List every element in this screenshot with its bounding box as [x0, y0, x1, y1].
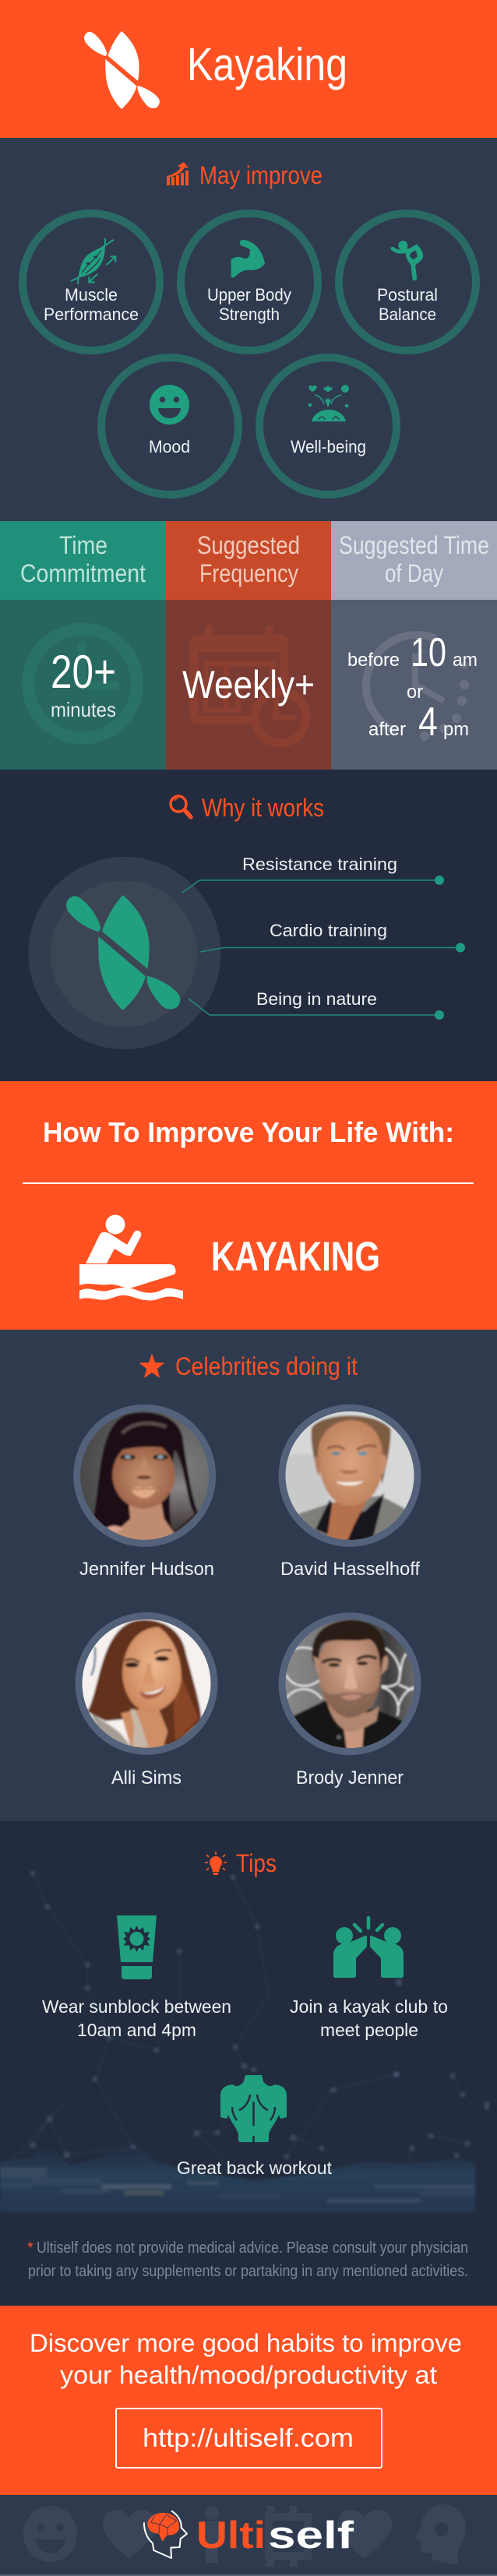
icon: clock background [366, 635, 469, 741]
tip: sunblock [42, 1915, 231, 2040]
badge: postural balance [339, 213, 476, 351]
label: meet people [320, 2020, 418, 2040]
url button: http://ultiself.com [143, 2423, 354, 2452]
label: Strength [219, 305, 280, 324]
name: Alli Sims: Alli Sims [111, 1767, 182, 1788]
panel: celebrities [76, 1352, 422, 1788]
time before: before [347, 650, 400, 671]
footer background icons [23, 2504, 466, 2567]
label: Muscle [65, 285, 118, 305]
url button [116, 2409, 382, 2468]
unit: minutes [51, 698, 116, 721]
heading: why it works: Why it works [202, 794, 324, 822]
value: 20+ [51, 646, 116, 698]
panel: call to action [0, 2306, 497, 2495]
heading: celebrities doing it: Celebrities doing it [175, 1352, 358, 1380]
callout: resistance training [182, 855, 444, 893]
heading: Frequency [199, 559, 298, 587]
icon: yoga pose [393, 241, 423, 278]
name: Brody Jenner: Brody Jenner [296, 1767, 404, 1788]
callout: being in nature [189, 989, 444, 1020]
icon: kayak and paddle [66, 895, 180, 1010]
icon: kayaker [79, 1215, 183, 1300]
label: Join a kayak club to [290, 1996, 448, 2017]
time after: after [368, 719, 406, 740]
icon: sunblock tube [117, 1915, 157, 1979]
panel: may improve [23, 161, 476, 495]
or: or [407, 682, 423, 703]
label: Wear sunblock between [42, 1996, 231, 2017]
heading: tips [205, 1849, 277, 1877]
icon: clock background [28, 629, 137, 738]
name: Jennifer Hudson: Jennifer Hudson [79, 1559, 214, 1580]
label: Great back workout [177, 2158, 333, 2178]
panel: time commitment [0, 521, 165, 770]
name: David Hasselhoff: David Hasselhoff [280, 1559, 420, 1580]
label: Upper Body [207, 285, 291, 305]
time after: pm [443, 719, 469, 740]
activity name: KAYAKING [211, 1234, 380, 1280]
callout: resistance training: Resistance training [242, 855, 397, 874]
badge: well-being [259, 358, 397, 495]
logo: ultiself: self [268, 2514, 354, 2557]
badge: upper body strength [181, 213, 318, 351]
logo: ultiself [144, 2511, 354, 2558]
icon: well-being [308, 385, 349, 421]
heading: Suggested [197, 531, 300, 559]
panel: suggested frequency [165, 521, 331, 770]
time before: 10 [411, 630, 446, 675]
portrait: Alli Sims [77, 1615, 217, 1755]
text: Discover more good habits to improve [30, 2329, 462, 2357]
panel: footer [0, 2495, 497, 2576]
heading: may improve: May improve [199, 161, 323, 189]
label: Postural [377, 285, 438, 305]
panel: how to improve banner [0, 1081, 497, 1330]
badge: mood [101, 358, 238, 495]
icon: flexed arm [231, 240, 265, 278]
tip: back workout [177, 2075, 333, 2178]
label: Performance [44, 305, 139, 324]
heading: How To Improve Your Life With: [43, 1116, 454, 1148]
heading: Time [59, 531, 108, 559]
icon: muscle [72, 239, 115, 284]
panel: why it works [0, 770, 497, 1081]
icon: smiley [150, 385, 189, 425]
panel: tips [0, 1821, 497, 2306]
diagram: concentric kayak [28, 857, 221, 1049]
value: Weekly+ [182, 663, 315, 707]
icon: back muscles [220, 2075, 287, 2142]
panel: header [0, 0, 497, 138]
label: Mood [149, 437, 190, 456]
heading: of Day [385, 559, 443, 587]
time after: 4 [418, 700, 438, 745]
title: Kayaking [187, 39, 347, 90]
icon: kayak and paddle [84, 31, 160, 109]
time after [368, 700, 469, 745]
callout: being in nature: Being in nature [256, 989, 377, 1009]
disclaimer: * [27, 2239, 33, 2257]
callout: cardio training: Cardio training [270, 921, 387, 940]
time before: am [453, 650, 478, 671]
badge: muscle performance [23, 213, 160, 351]
label: Balance [379, 305, 436, 324]
icon: brain head [144, 2511, 187, 2558]
portrait: Jennifer Hudson [76, 1408, 216, 1548]
time before [347, 630, 478, 675]
callout: cardio training [200, 921, 465, 952]
portrait: Brody Jenner [282, 1615, 422, 1755]
portrait: David Hasselhoff [282, 1408, 422, 1548]
icon: high five [333, 1918, 404, 1978]
heading: tips: Tips [236, 1849, 277, 1877]
logo: ultiself: Ulti [196, 2514, 266, 2557]
icon: calendar and clock background [194, 629, 306, 743]
label: Well-being [291, 437, 366, 456]
panel: suggested time of day [331, 521, 497, 770]
tip: kayak club [290, 1918, 448, 2040]
label: 10am and 4pm [77, 2020, 196, 2040]
text: your health/mood/productivity at [60, 2361, 437, 2389]
heading: Commitment [20, 559, 146, 587]
